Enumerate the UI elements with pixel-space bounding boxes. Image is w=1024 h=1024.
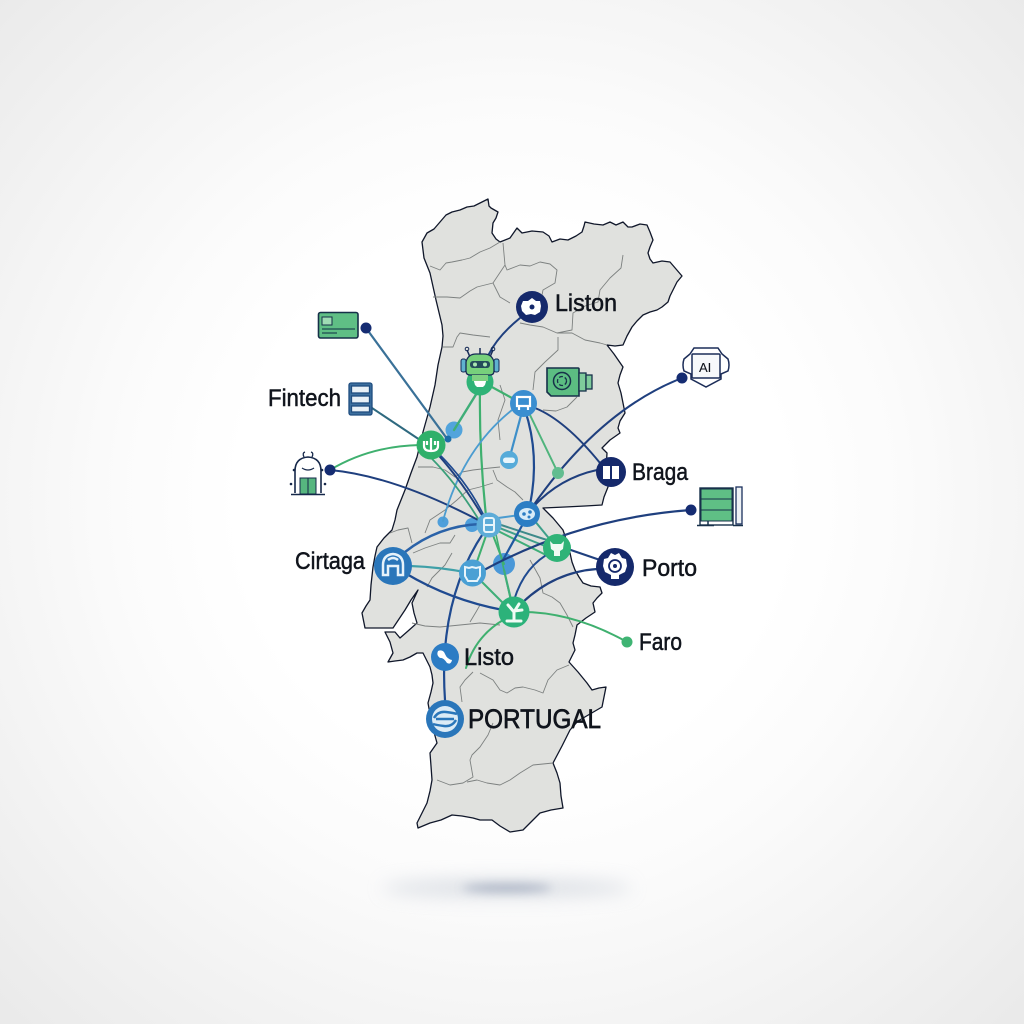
label: Listo: Listo [464,644,514,671]
node: blue chip [514,501,540,527]
node: green cup [543,534,571,562]
node: central hub [476,512,502,538]
node: Portugal logo [426,700,464,738]
node: Listo [431,643,459,671]
node: small green [552,467,564,479]
map of Portugal [362,199,682,832]
icon: green robot [461,347,499,396]
node: small blue cluster [438,422,515,575]
label: Braga: Braga [632,459,688,486]
node: green hub [416,430,446,460]
link dot: card [360,322,372,334]
icon: AI shield: AI [699,360,711,375]
node: Liston pin [516,291,548,323]
label: Liston: Liston [555,290,617,317]
region borders [390,242,623,785]
node: Braga book [596,457,626,487]
node: Porto gear [596,548,634,586]
node: light-blue shield [459,560,486,586]
node: green tree [498,596,530,628]
label: Cirtaga: Cirtaga [295,548,366,575]
label: PORTUGAL: PORTUGAL [468,704,601,734]
icon: barn [290,452,326,494]
link dot: barn [324,464,336,476]
node: Cirtaga building [374,547,412,585]
network links [330,318,691,700]
node: light-blue pill [500,451,518,469]
icon: AI shield [683,348,729,387]
label: Faro: Faro [639,629,682,656]
link dot: Faro [622,636,632,648]
ground shadow [382,879,632,897]
node: blue transit [510,390,537,417]
link dot: server [686,504,696,516]
label: Porto: Porto [642,555,697,582]
icon: green server [697,487,743,526]
icon: green camera module [547,368,592,396]
icon: green payment card [318,312,358,338]
label: Fintech: Fintech [268,385,341,412]
node: small dark blue [444,436,452,442]
link dot: AI [676,372,688,384]
icon: server rack [349,383,372,415]
